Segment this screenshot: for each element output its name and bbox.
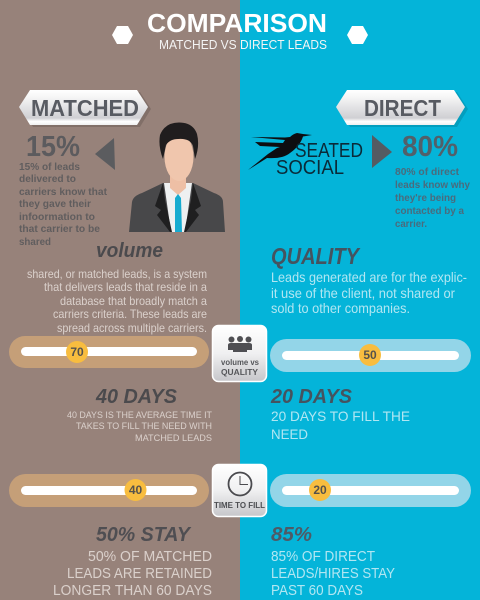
heading: quality: QUALITY [271,243,361,269]
text: matched stat description: delivered to [19,174,76,185]
slider: matched time 40: 40 [129,483,142,497]
icon: right hexagon [347,26,368,44]
text: direct stat description: contacted by a [395,206,464,217]
icon: left hexagon [112,26,133,44]
text: 40 days description: TAKES TO FILL THE NEED WITH [76,421,212,431]
text: direct stat description [395,167,470,230]
text: retention matched description: LEADS ARE RETAINED [67,565,212,582]
text: 20 days description: NEED [271,426,308,442]
icon: clock [228,472,252,496]
stat: 80 percent: 80% [402,131,458,163]
slider: matched volume 70: 70 [70,345,84,359]
text: quality description: sold to other companies. [271,300,410,316]
slider: matched time 40 [9,474,209,507]
badge: matched [19,90,151,127]
icon: businessman [129,122,225,232]
text: retention direct description [271,548,395,599]
slider: direct time 20 [270,474,471,507]
card: volume vs quality [212,326,266,382]
title: MATCHED VS DIRECT LEADS [159,37,327,52]
text: retention matched description: 50% OF MATCHED [88,548,212,565]
text: matched stat description: 15% of leads [19,162,80,173]
text: matched stat description: infoormation to [19,212,95,223]
text: direct stat description: carrier. [395,219,427,230]
text: volume description: spread across multiple carriers. [57,321,207,335]
heading: 50 percent stay: 50% STAY [96,524,192,546]
text: retention matched description: LONGER THAN 60 DAYS [53,582,212,599]
title: COMPARISON [147,8,327,38]
text: volume description: carriers criteria. These leads are [53,307,207,321]
slider: direct time 20: 20 [313,483,327,497]
text: 20 days description [271,408,410,442]
badge: matched: MATCHED [31,95,139,121]
text: quality description: it use of the client, not shared or [271,285,455,301]
title [147,8,327,52]
text: 20 days description: 20 DAYS TO FILL THE [271,408,410,424]
logo: seated social [248,133,363,179]
heading: 40 days: 40 DAYS [95,386,178,408]
heading: 85 percent: 85% [271,524,312,546]
text: 40 days description: MATCHED LEADS [135,433,212,443]
card: time to fill: TIME TO FILL [214,501,265,510]
stat: 15 percent: 15% [26,131,80,163]
slider: matched volume 70 [9,336,209,368]
text: retention direct description: 85% OF DIRECT [271,548,375,565]
heading: volume: volume [96,240,163,262]
slider: direct quality 50 [270,339,471,372]
text: direct stat description: they're being [395,193,456,204]
right background panel [240,0,480,600]
text: direct stat description: leads know why [395,180,470,191]
slider: direct quality 50: 50 [363,348,377,362]
text: 40 days description: 40 DAYS IS THE AVERAGE TIME IT [67,410,212,420]
text: matched stat description: they gave their [19,199,91,210]
logo: seated social: SOCIAL [276,157,344,179]
icon: group of people [228,336,252,352]
text: direct stat description: 80% of direct [395,167,460,178]
text: volume description: database that broadly match a [60,294,207,308]
text: quality description [271,269,467,316]
card: volume vs quality: volume vs [221,358,260,367]
text: retention direct description: PAST 60 DAYS [271,582,363,599]
card: volume vs quality: QUALITY [221,367,258,377]
text: 40 days description [67,410,212,443]
text: matched stat description: that carrier to be [19,224,100,235]
logo: seated social: SEATED [295,140,363,162]
text: matched stat description: carriers know that [19,187,108,198]
arrow: left [95,138,115,170]
arrow: right [372,135,392,168]
text: matched stat description: shared [19,237,51,248]
text: retention matched description [53,548,212,599]
badge: direct: DIRECT [364,95,441,121]
text: matched stat description [19,162,108,248]
card: time to fill [212,464,266,516]
badge: direct [336,90,468,127]
heading: 20 days: 20 DAYS [270,386,353,408]
left background panel [0,0,240,600]
text: volume description [27,267,207,335]
text: retention direct description: LEADS/HIRES STAY [271,565,395,582]
text: volume description: shared, or matched leads, is a system [27,267,207,281]
text: volume description: that delivers leads that reside in a [44,280,207,294]
